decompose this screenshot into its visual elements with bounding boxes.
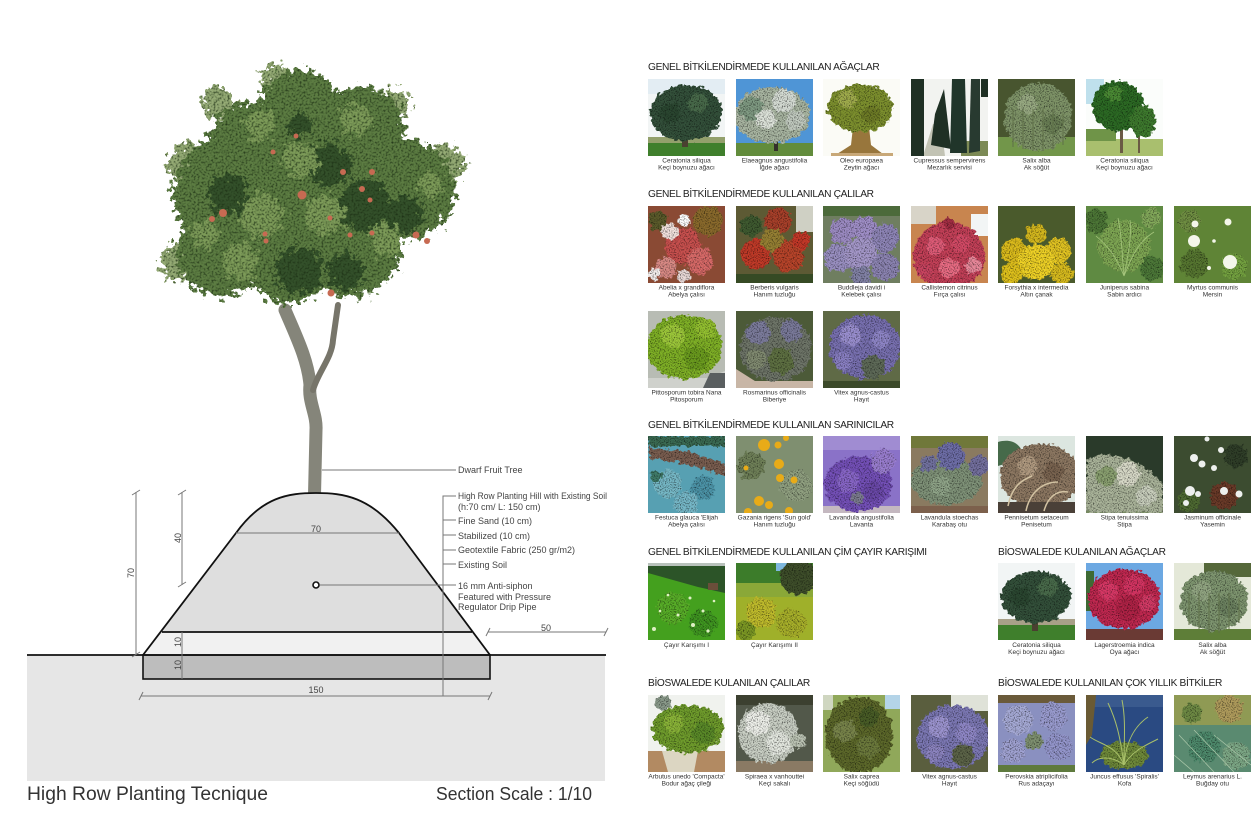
annotation labels: Stabilized (10 cm) — [458, 531, 530, 541]
caption: Hanım tuzluğu — [754, 292, 796, 298]
dimension: sand and stabilized layers: 10 — [173, 660, 183, 670]
photo — [734, 79, 813, 156]
photo — [823, 311, 901, 388]
panel: general trees — [648, 60, 1163, 172]
caption: Rus adaçayı — [1018, 780, 1055, 788]
caption: Keçi söğüdü — [844, 780, 880, 788]
heading: BİOSWALEDE KULANILAN AĞAÇLAR — [998, 545, 1166, 558]
photo — [910, 436, 989, 513]
caption: Pitosporum — [670, 396, 703, 404]
scale note: Section Scale : 1/10 — [436, 784, 592, 804]
caption: Keçi boynuzu ağacı — [658, 164, 715, 172]
card: Juncus effusus — [1086, 695, 1163, 788]
annotation labels: 16 mm Anti-siphon — [458, 581, 533, 591]
caption: Rosmarinus officinalis — [743, 390, 807, 396]
photo — [1086, 563, 1163, 640]
caption: Ak söğüt — [1024, 164, 1049, 172]
caption: Jasminum officinale — [1184, 514, 1241, 522]
photo — [911, 79, 988, 156]
annotation labels: Featured with Pressure — [458, 592, 551, 602]
caption: Myrtus communis — [1187, 284, 1239, 292]
card: Olea europaea — [823, 79, 900, 172]
drawing title: High Row Planting Tecnique — [27, 783, 268, 805]
annotation labels: Regulator Drip Pipe — [458, 602, 537, 612]
caption: Abelya çalısı — [668, 522, 705, 528]
photo — [998, 436, 1080, 513]
photo — [648, 206, 725, 283]
photo — [998, 206, 1075, 285]
caption: Salix alba — [1022, 158, 1051, 164]
leader lines — [320, 470, 456, 696]
card: Rosmarinus officinalis — [736, 311, 813, 404]
photo — [1086, 79, 1163, 156]
caption: Ceratonia siliqua — [1100, 158, 1149, 164]
card: meadow mix I — [648, 563, 725, 649]
photo — [823, 695, 900, 773]
card: Callistemon citrinus — [911, 206, 988, 298]
caption: Forsythia x intermedia — [1005, 284, 1069, 292]
dimension: spacing 50: 50 — [541, 623, 551, 633]
photo — [648, 436, 725, 516]
caption: Mersin — [1203, 292, 1223, 298]
annotation labels: (h:70 cm/ L: 150 cm) — [458, 502, 541, 512]
photo — [1084, 206, 1164, 283]
card: Salix alba — [1174, 563, 1251, 656]
card: Buddleja davidii — [823, 206, 900, 298]
caption: Altın çanak — [1020, 292, 1053, 298]
caption: Biberiye — [763, 396, 787, 404]
caption: Karabaş otu — [932, 522, 967, 528]
photo — [1086, 695, 1163, 772]
card: Berberis vulgaris — [736, 206, 813, 298]
dimension: height 70: 70 — [126, 568, 136, 578]
photo — [736, 311, 813, 388]
caption: Ak söğüt — [1200, 649, 1225, 656]
card: Elaeagnus angustifolia — [734, 79, 813, 172]
caption: Lavandula stoechas — [921, 514, 979, 522]
card: Gazania rigens — [736, 435, 813, 528]
ground soil block — [27, 655, 605, 781]
photo — [646, 311, 725, 388]
photo — [998, 79, 1075, 156]
caption: Juniperus sabina — [1100, 284, 1149, 292]
panel: bioswale shrubs — [648, 676, 989, 788]
card: Arbutus unedo — [648, 695, 725, 788]
photo — [1174, 206, 1251, 283]
ground line — [27, 654, 606, 656]
card: Abelia x grandiflora — [648, 206, 725, 298]
photo — [736, 695, 813, 772]
card: Jasminum officinale — [1174, 436, 1251, 528]
card: Vitex agnus-castus — [823, 311, 901, 404]
caption: Hanım tuzluğu — [754, 522, 796, 528]
card: meadow mix II — [736, 559, 816, 649]
dimension: width 150 — [139, 685, 492, 700]
caption: Salix caprea — [844, 774, 880, 780]
caption: Stipa — [1117, 522, 1132, 528]
card: Lavandula stoechas — [910, 436, 989, 528]
annotation labels: Dwarf Fruit Tree — [458, 465, 523, 475]
tree trunk — [285, 305, 338, 495]
photo — [823, 436, 900, 513]
hill outline — [143, 493, 490, 655]
panel: meadow mix — [648, 545, 927, 649]
caption: Festuca glauca 'Elijah — [655, 514, 718, 522]
heading: BİOSWALEDE KULANILAN ÇALILAR — [648, 676, 810, 689]
annotation labels: High Row Planting Hill with Existing Soil — [458, 491, 607, 501]
dimension: width 70: 70 — [311, 524, 321, 534]
annotation labels — [458, 465, 607, 612]
photo — [998, 563, 1075, 640]
caption: Abelya çalısı — [668, 292, 705, 298]
caption: Perovskia atriplicifolia — [1005, 774, 1068, 780]
dimension: width 150: 150 — [308, 685, 324, 695]
card: Lavandula angustifolia — [823, 436, 900, 528]
photo — [648, 563, 725, 640]
caption: Oleo europaea — [840, 158, 883, 164]
heading: GENEL BİTKİLENDİRMEDE KULLANILAN ÇİM ÇAYIR KARIŞIMI — [648, 545, 927, 558]
caption: Hayıt — [942, 780, 957, 788]
panel: bioswale perennials — [998, 676, 1251, 788]
photo — [736, 206, 813, 283]
caption: Keçi boynuzu ağacı — [1008, 649, 1065, 656]
caption: Lavanta — [850, 522, 873, 528]
dimension: sand and stabilized layers — [173, 632, 183, 679]
card: Myrtus communis — [1174, 206, 1251, 298]
caption: Abelia x grandiflora — [659, 284, 715, 292]
card: Juniperus sabina — [1084, 206, 1164, 298]
caption: Hayıt — [854, 396, 869, 404]
heading: GENEL BİTKİLENDİRMEDE KULLANILAN ÇALILAR — [648, 187, 874, 200]
caption: Callistemon citrinus — [921, 284, 978, 292]
photo — [736, 559, 816, 641]
caption: Gazania rigens 'Sun gold' — [738, 514, 811, 522]
caption: Vitex agnus-castus — [922, 774, 978, 780]
caption: Keçi boynuzu ağacı — [1096, 164, 1153, 172]
panel: general ground covers — [648, 418, 1251, 528]
caption: Bodur ağaç çileği — [662, 780, 711, 788]
card: Stipa tenuissima — [1086, 436, 1163, 528]
card: Forsythia x intermedia — [998, 206, 1075, 298]
photo — [911, 695, 989, 772]
card: Festuca glauca — [648, 436, 725, 528]
dimension: spacing 50 — [486, 623, 608, 636]
caption: Salix alba — [1198, 642, 1227, 649]
card: Ceratonia siliqua — [648, 79, 725, 172]
caption: Elaeagnus angustifolia — [742, 158, 808, 164]
photo — [823, 206, 900, 286]
caption: Ceratonia siliqua — [662, 158, 711, 164]
card: Ceratonia siliqua — [998, 563, 1075, 656]
drip pipe symbol — [313, 582, 319, 588]
caption: Zeytin ağacı — [844, 164, 879, 172]
caption: Buddleja davidi i — [838, 284, 885, 292]
dimension: height 40 — [173, 490, 186, 587]
panel: bioswale trees — [998, 545, 1251, 656]
card: Pittosporum tobira Nana — [646, 311, 725, 404]
card: Lagerstroemia indica — [1086, 563, 1163, 656]
photo — [1174, 695, 1251, 772]
caption: Kelebek çalısı — [841, 292, 882, 298]
caption: Arbutus unedo 'Compacta' — [648, 774, 725, 780]
caption: Leymus arenarius L. — [1183, 774, 1242, 780]
caption: Çayır Karışımı II — [751, 642, 798, 649]
card: Pennisetum setaceum — [998, 436, 1080, 528]
caption: Penisetum — [1021, 522, 1052, 528]
photo — [1174, 563, 1251, 640]
photo — [911, 206, 988, 290]
caption: Mezarlık servisi — [927, 164, 972, 172]
photo — [823, 79, 900, 156]
annotation labels: Existing Soil — [458, 560, 507, 570]
panel: general shrubs — [646, 187, 1251, 404]
card: Vitex agnus-castus — [911, 695, 989, 788]
card: Salix alba — [998, 79, 1075, 172]
caption: Kofa — [1118, 780, 1132, 788]
card: Salix caprea — [823, 695, 900, 788]
card: Spiraea x vanhouttei — [736, 695, 813, 788]
caption: Sabin ardıcı — [1107, 292, 1142, 298]
annotation labels: Geotextile Fabric (250 gr/m2) — [458, 545, 575, 555]
photo — [736, 435, 813, 516]
heading: GENEL BİTKİLENDİRMEDE KULLANILAN AĞAÇLAR — [648, 60, 879, 73]
photo — [998, 695, 1075, 772]
caption: Ceratonia siliqua — [1012, 642, 1061, 649]
caption: Berberis vulgaris — [750, 284, 799, 292]
card: Leymus arenarius — [1174, 695, 1251, 788]
caption: Keçi sakalı — [759, 780, 790, 788]
caption: Cupressus sempervirens — [914, 158, 986, 164]
planting hill — [143, 493, 490, 655]
stabilized layer — [143, 655, 490, 679]
caption: Spiraea x vanhouttei — [745, 774, 804, 780]
card: Cupressus sempervirens — [911, 79, 988, 172]
caption: Lagerstroemia indica — [1094, 642, 1155, 649]
caption: Lavandula angustifolia — [829, 514, 894, 522]
fine sand layer — [143, 632, 490, 655]
caption: Çayır Karışımı I — [664, 642, 709, 649]
caption: İğde ağacı — [759, 162, 790, 172]
photo — [648, 79, 725, 156]
panel: planting section drawing — [27, 64, 608, 805]
caption: Yasemin — [1200, 522, 1225, 528]
photo — [1086, 436, 1163, 513]
caption: Juncus effusus 'Spiralis' — [1090, 774, 1159, 780]
photo — [1174, 436, 1251, 513]
dimension: sand and stabilized layers: 10 — [173, 637, 183, 647]
caption: Stipa tenuissima — [1101, 514, 1149, 522]
caption: Buğday otu — [1196, 780, 1229, 788]
card: Ceratonia siliqua (young) — [1086, 79, 1163, 172]
dimension: height 40: 40 — [173, 533, 183, 543]
dimension: height 70 — [126, 490, 140, 657]
caption: Vitex agnus-castus — [834, 390, 890, 396]
tree crown with fruit — [160, 64, 465, 304]
caption: Pittosporum tobira Nana — [651, 390, 722, 396]
heading: BİOSWALEDE KULLANILAN ÇOK YILLIK BİTKİLER — [998, 676, 1222, 689]
caption: Pennisetum setaceum — [1004, 514, 1069, 522]
heading: GENEL BİTKİLENDİRMEDE KULLANILAN SARINICILAR — [648, 418, 894, 431]
card: Perovskia atriplicifolia — [998, 695, 1075, 788]
annotation labels: Fine Sand (10 cm) — [458, 516, 532, 526]
caption: Fırça çalısı — [934, 292, 966, 298]
photo — [648, 695, 725, 772]
caption: Oya ağacı — [1110, 649, 1140, 656]
